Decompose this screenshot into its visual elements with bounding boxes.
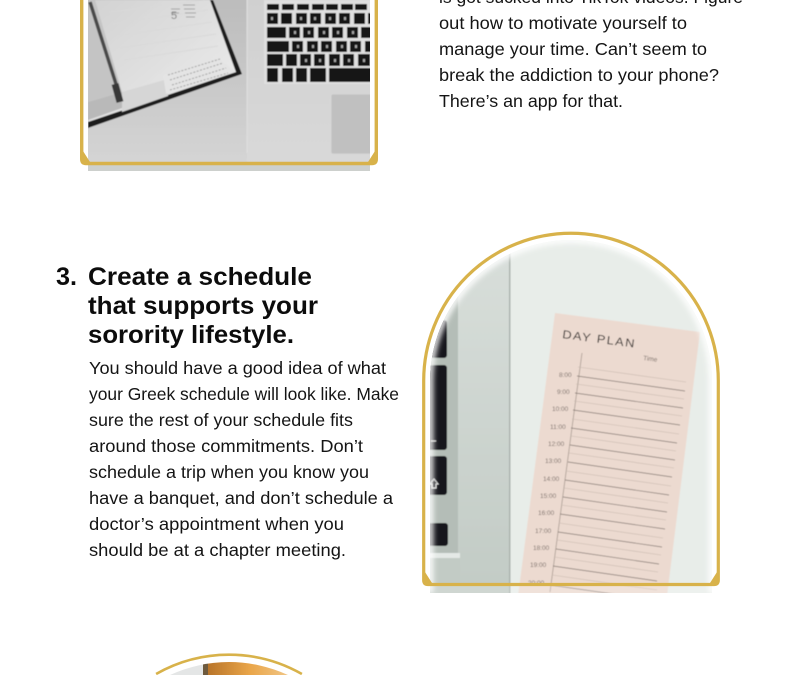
text block: section 2 closing copy: manage your time. Can’t seem to	[439, 39, 707, 59]
photo: day plan notepad: 15:00	[540, 493, 557, 500]
photo: laptop and notebook	[86, 0, 373, 173]
text block: section 2 closing copy: break the addiction to your phone?	[439, 65, 719, 85]
heading: section 3: 3.	[56, 263, 77, 291]
photo: day plan notepad: 12:00	[548, 441, 565, 448]
heading: section 3: Create a schedule	[88, 263, 312, 291]
photo: day plan notepad: 13:00	[545, 458, 562, 465]
text block: section 2 closing copy: out how to motivate yourself to	[439, 13, 687, 33]
text block: section 3 body: around those commitments. Don’t	[89, 436, 363, 456]
photo: day plan notepad: 10:00	[552, 406, 569, 413]
photo: day plan notepad: 17:00	[535, 528, 552, 535]
text block: section 3 body: have a banquet, and don’t schedule a	[89, 488, 393, 508]
heading: section 3: that supports your	[88, 292, 318, 320]
photo: day plan notepad: 16:00	[538, 510, 555, 517]
heading: section 3	[56, 263, 318, 349]
photo: day plan notepad: DAY PLAN	[562, 329, 637, 351]
photo: day plan notepad	[426, 238, 716, 596]
photo: day plan notepad: 8:00	[559, 372, 572, 379]
photo: day plan notepad: 14:00	[543, 476, 560, 483]
photo: day plan notepad: 18:00	[533, 545, 550, 552]
photo: day plan notepad: 9:00	[557, 389, 570, 396]
text block: section 3 body: sure the rest of your schedule fits	[89, 410, 353, 430]
photo: day plan notepad: 19:00	[530, 562, 547, 569]
text block: section 3 body: doctor’s appointment when you	[89, 514, 344, 534]
photo: section 4 arch image	[170, 662, 288, 675]
photo: day plan notepad: 11:00	[550, 424, 566, 431]
gold arch frame: section 4 image	[156, 655, 302, 674]
text block: section 3 body: You should have a good idea of what	[89, 358, 386, 378]
photo: day plan notepad: Time	[643, 355, 658, 364]
text block: section 2 closing copy	[439, 0, 743, 111]
text block: section 3 body: should be at a chapter meeting.	[89, 540, 346, 560]
heading: section 3: sorority lifestyle.	[88, 321, 294, 349]
photo: laptop and notebook: 5	[171, 10, 177, 22]
gold arch frame: day plan image	[424, 233, 718, 584]
gold frame: top image	[82, 0, 376, 164]
text block: section 3 body: schedule a trip when you know you	[89, 462, 369, 482]
text block: section 2 closing copy: There’s an app for that.	[439, 91, 623, 111]
photo: day plan notepad: 20:00	[528, 580, 545, 587]
text block: section 3 body: your Greek schedule will look like. Make	[89, 384, 399, 404]
text block: section 3 body	[89, 358, 399, 560]
